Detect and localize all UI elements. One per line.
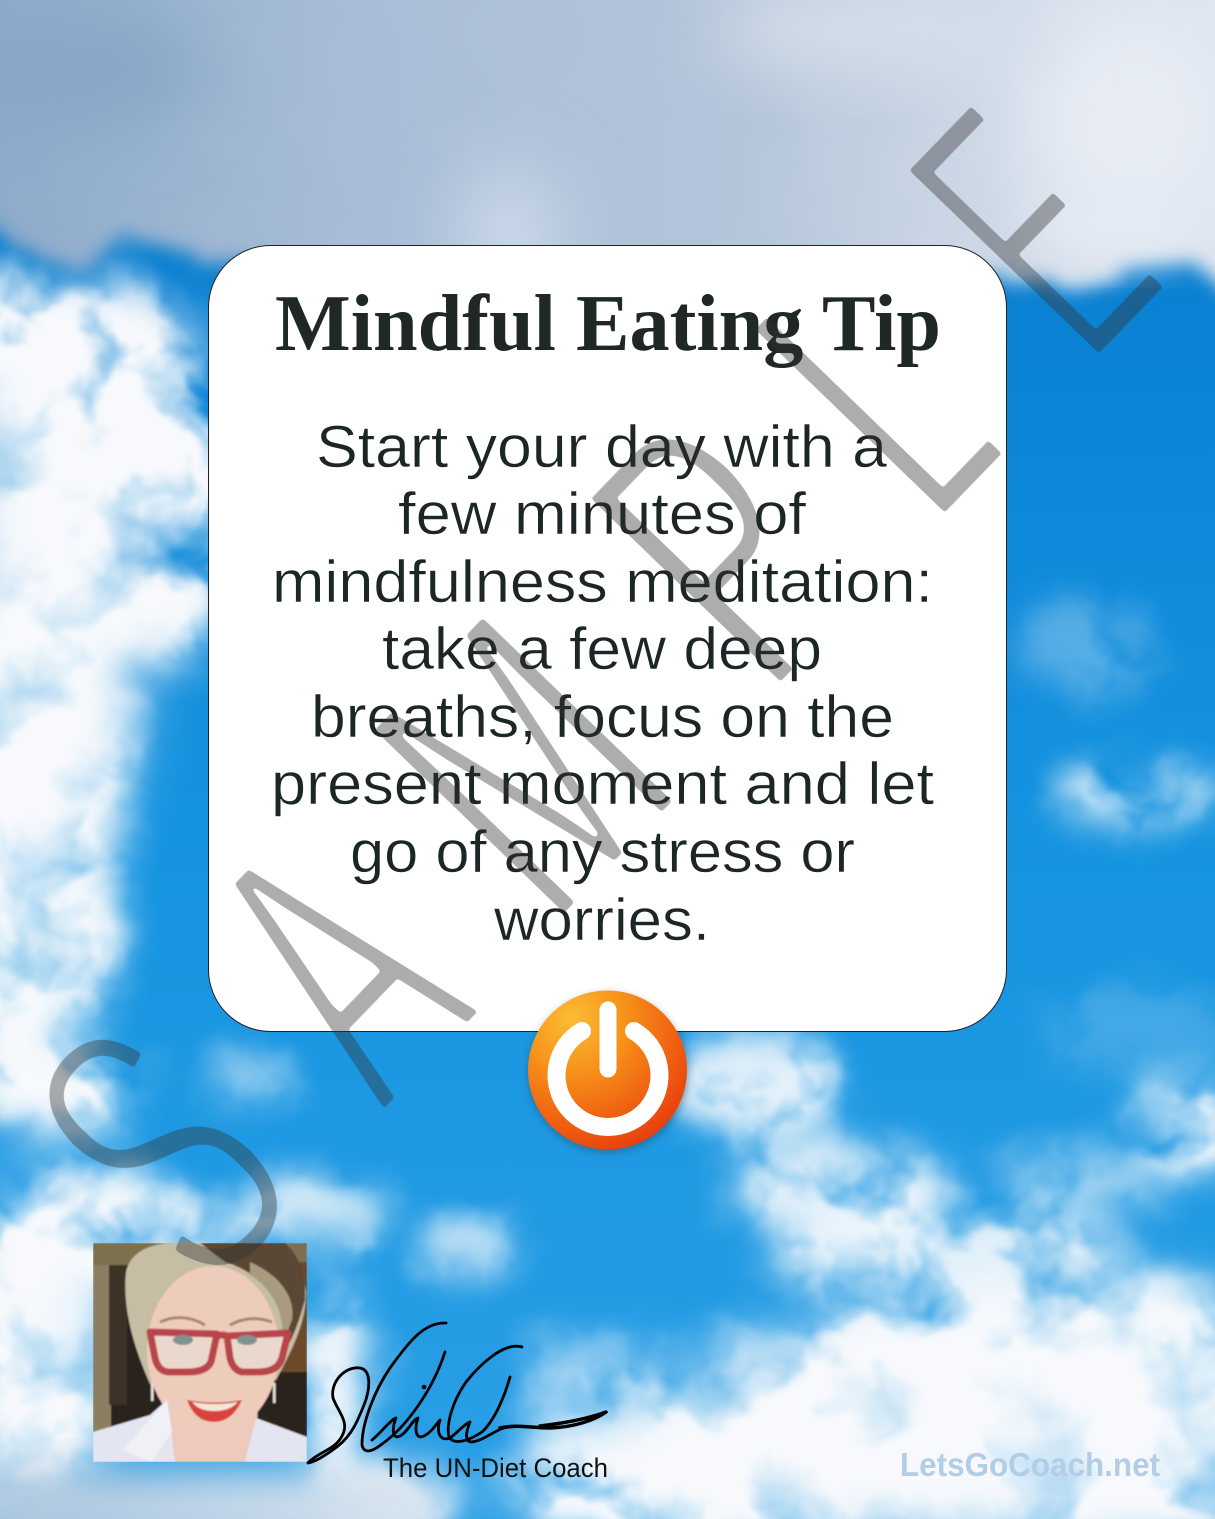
glasses: [150, 1332, 288, 1372]
text block: tip body: mindfulness meditation:: [272, 549, 933, 615]
website: LetsGoCoach.net: LetsGoCoach.net: [900, 1446, 1160, 1483]
text block: tip body: Start your day with a: [316, 414, 887, 480]
text block: tip body: take a few deep: [382, 616, 822, 682]
text block: tip body: few minutes of: [398, 481, 807, 547]
watermark: SAMPLE: M: [292, 537, 753, 992]
text block: tip body: [271, 414, 934, 953]
face: [146, 1266, 278, 1412]
watermark: SAMPLE: A: [125, 761, 548, 1176]
neck: [168, 1412, 259, 1462]
text block: tip body: breaths, focus on the: [311, 684, 894, 750]
panel: tip card: [208, 246, 1006, 1032]
signature: [308, 1323, 606, 1463]
icon: orange power button: [528, 990, 688, 1153]
photo: coach portrait: [93, 1243, 307, 1462]
eyes: [173, 1335, 193, 1345]
earrings: [151, 1383, 154, 1401]
heading: Mindful Eating Tip: Mindful Eating Tip: [275, 278, 941, 368]
text block: tip body: go of any stress or: [350, 819, 855, 885]
hair: [125, 1243, 306, 1384]
text block: tip body: worries.: [493, 887, 710, 953]
watermark: SAMPLE: L: [678, 202, 1072, 588]
shirt: [93, 1400, 175, 1462]
watermark: SAMPLE: P: [511, 341, 936, 759]
smile: [187, 1400, 242, 1422]
caption: The UN-Diet Coach: The UN-Diet Coach: [383, 1453, 608, 1483]
text block: tip body: present moment and let: [271, 751, 934, 817]
